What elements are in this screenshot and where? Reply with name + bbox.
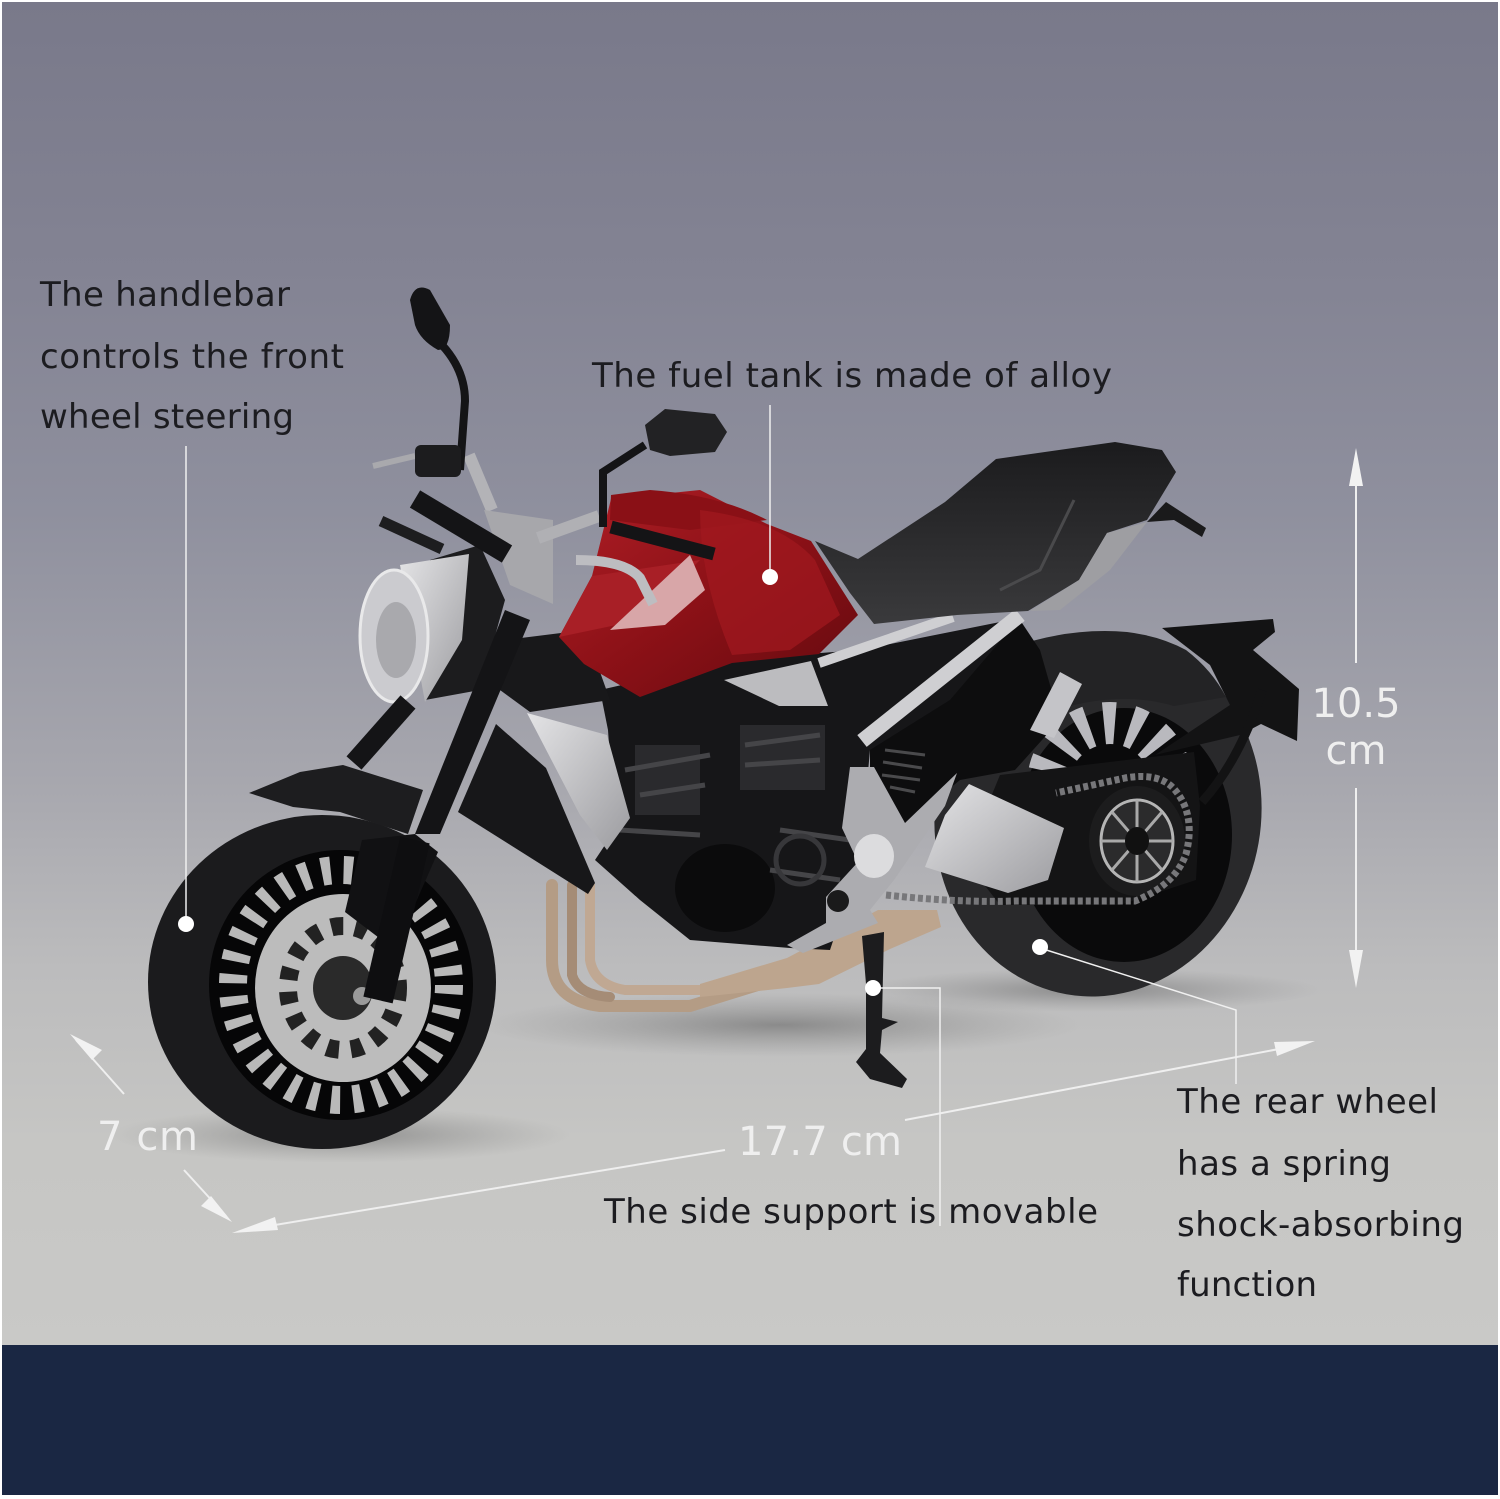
shock region [870,620,1082,825]
dimension: length: 17.7 cm [738,1119,902,1165]
front wheel [148,815,496,1149]
engine [595,618,1020,950]
handlebar [373,455,714,604]
seat silver trim [1030,522,1147,611]
seat [815,442,1176,624]
rack stay [1202,690,1262,802]
callout dots [178,569,1048,996]
rear sprocket hub [1089,786,1185,896]
side silver cowl [527,713,630,850]
dimension arrows [70,448,1363,1233]
drive chain [886,776,1189,901]
length arrow [232,1041,1315,1233]
label: handlebar: The handlebar [39,275,290,315]
silver frame tubes [819,615,1020,741]
footer band [2,1345,1498,1495]
frame plate [724,661,828,706]
label: handlebar [39,275,344,437]
rear fender hugger bracket [1155,619,1299,755]
label: rear wheel: The rear wheel [1176,1082,1438,1122]
label: fuel tank: The fuel tank is made of alloy [591,356,1112,396]
right mirror [603,409,727,527]
dimension: width: 7 cm [97,1114,198,1160]
label: rear wheel: shock-absorbing [1177,1205,1464,1245]
swing arm [965,752,1200,905]
headlight [360,545,505,702]
chain guard [925,784,1064,893]
label: rear wheel [1176,1082,1464,1305]
dimension: height: cm [1326,728,1386,774]
dark area under tank [500,630,610,712]
fuel tank [559,490,858,697]
motorcycle illustration [148,288,1299,1149]
rear wheel [906,607,1290,1023]
dimension: height: 10.5 [1311,681,1401,727]
height arrow [1349,448,1363,988]
left mirror [410,288,465,477]
radiator [458,724,595,894]
tail tip [1147,502,1206,537]
label: side support: The side support is movable [603,1192,1098,1232]
label: handlebar: controls the front [40,337,344,377]
side stand [856,932,907,1088]
label: rear wheel: has a spring [1177,1144,1391,1184]
ground shadow [110,968,1320,1163]
front fender [249,765,423,834]
fork [345,610,530,1000]
label: handlebar: wheel steering [40,397,294,437]
width arrow [70,1034,232,1222]
label: rear wheel: function [1177,1265,1317,1305]
exhaust pipes [552,885,790,1006]
dimension: height [1311,681,1401,774]
swing-arm pivot plate [787,767,957,953]
muffler [700,910,941,997]
callout lines [186,405,1236,1226]
